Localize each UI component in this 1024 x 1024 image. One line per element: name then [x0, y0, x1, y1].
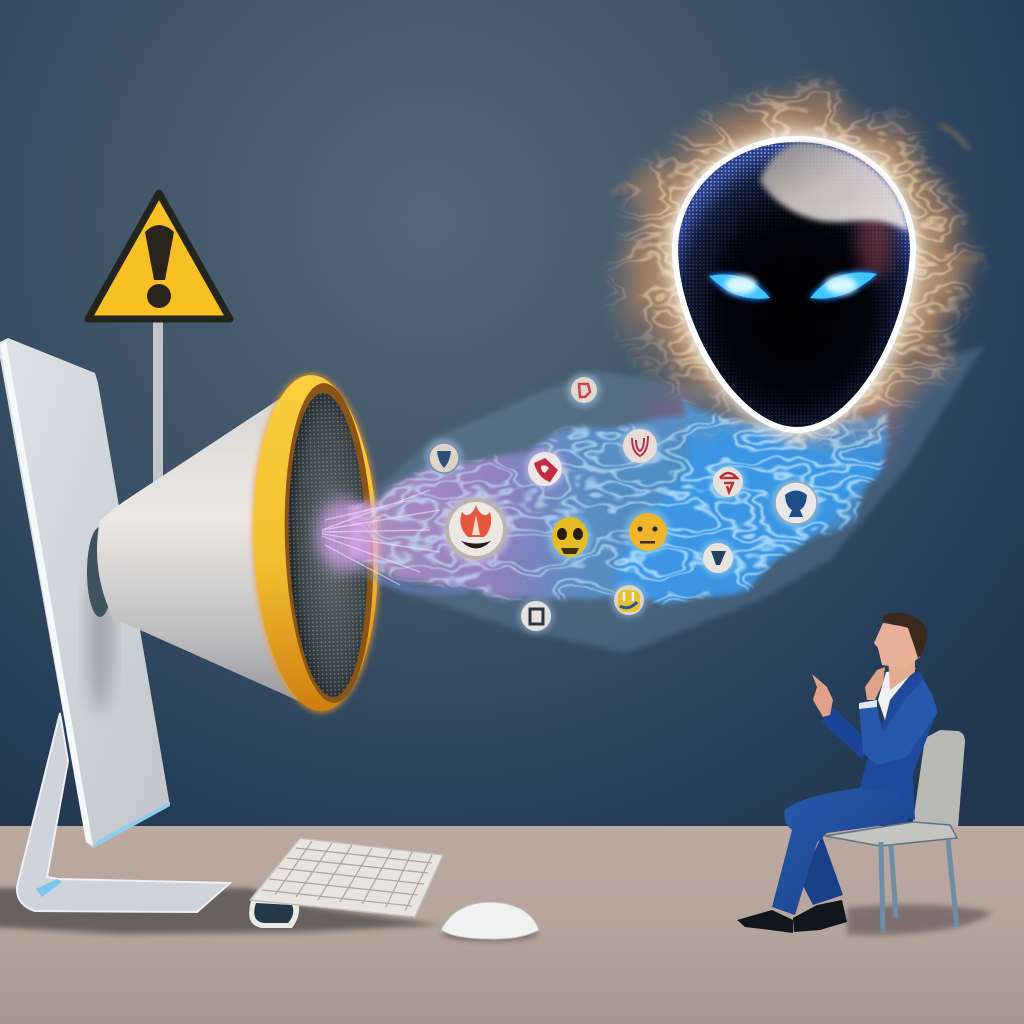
head: [874, 623, 920, 668]
glowing eyes: [708, 271, 878, 300]
chair legs: [881, 840, 957, 933]
megaphone inner wall: [279, 382, 379, 704]
mouse: [441, 902, 539, 941]
face glow: [671, 134, 917, 434]
torso: [860, 672, 938, 820]
neck: [888, 655, 915, 690]
red cheek tint: [857, 200, 893, 280]
icon: top badge: [567, 373, 601, 407]
face surface: [678, 142, 910, 427]
icon: mouth badge: [710, 464, 746, 500]
energy stream: [317, 345, 985, 653]
floor: [0, 826, 1024, 1024]
megaphone rim glow: [246, 371, 386, 715]
rear leg: [800, 836, 843, 905]
grey forehead patch: [760, 143, 909, 232]
icon: down badge: [700, 540, 736, 576]
burst from speaker: [317, 490, 470, 592]
chair back: [913, 730, 965, 827]
faint web: [350, 345, 985, 653]
rear shoe: [793, 900, 847, 932]
keyboard deck: [250, 838, 443, 917]
icon: sad emoji: [625, 509, 671, 555]
bright blue region: [610, 395, 888, 605]
chair seat: [825, 822, 957, 846]
face halo flames: [610, 85, 980, 455]
warning sign: [88, 193, 230, 483]
seated man: [737, 613, 938, 933]
icon: yellow face badge: [611, 582, 647, 618]
icon: skull emoji: [548, 514, 592, 562]
icon: fire: [441, 494, 511, 564]
megaphone cone: [97, 392, 310, 706]
hair: [883, 613, 927, 658]
front leg: [772, 788, 912, 915]
reddish fragments: [640, 395, 905, 470]
cuff: [859, 700, 877, 709]
face outline: [672, 136, 916, 433]
raised hand: [812, 674, 833, 717]
monitor stand: [17, 713, 230, 912]
main band: [350, 417, 876, 603]
icon: square badge: [518, 598, 554, 634]
keyboard: [249, 838, 443, 928]
dot texture: [678, 142, 910, 427]
megaphone rim: [248, 373, 384, 713]
floating icons: [425, 373, 820, 634]
keyboard roll: [249, 898, 299, 928]
near arm: [859, 680, 937, 765]
icon: shield badge: [425, 439, 463, 477]
icon: red tag badge: [525, 449, 565, 489]
speaker mesh: [284, 392, 372, 698]
icon: ribbon badge: [620, 426, 660, 466]
glowing mask face: [671, 134, 917, 434]
far arm: [822, 707, 867, 760]
megaphone: [87, 371, 386, 715]
shirt: [878, 668, 916, 720]
megaphone neck: [87, 527, 113, 617]
front shoe: [737, 910, 793, 933]
hand on chin: [865, 667, 885, 700]
monitor: [0, 338, 170, 848]
icon: keyhole badge: [772, 479, 820, 527]
chair: [825, 730, 965, 933]
